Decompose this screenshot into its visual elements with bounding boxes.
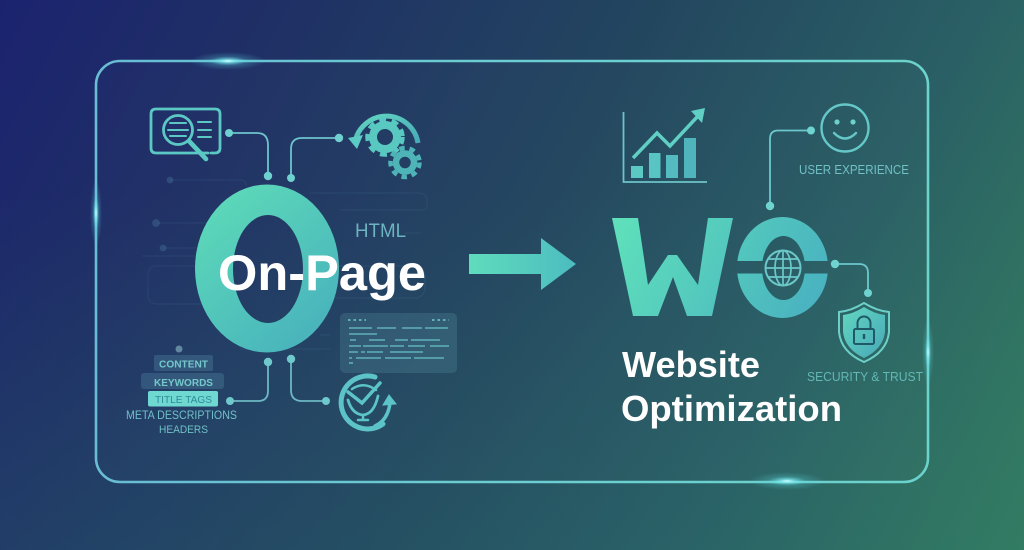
connector: WO to smiley xyxy=(766,126,815,210)
icon: gears xyxy=(348,116,420,177)
label: HTML: HTML xyxy=(355,221,406,242)
faint circuit background lines xyxy=(142,177,427,349)
heading: Website Optimization xyxy=(621,344,842,429)
icon: smiley xyxy=(822,104,868,152)
connector: WO to shield xyxy=(831,260,872,297)
letter W xyxy=(612,218,733,316)
code panel xyxy=(340,313,457,373)
tag: title tags: TITLE TAGS xyxy=(155,394,212,406)
small dot xyxy=(176,346,182,352)
tag: content: CONTENT xyxy=(159,358,209,370)
icon: growth chart xyxy=(624,108,707,182)
connector: O to check icon xyxy=(287,355,330,405)
letter O with gap xyxy=(737,217,828,318)
heading: Website Optimization: Optimization xyxy=(621,388,842,429)
icon: check cycle xyxy=(341,376,396,429)
tag: meta descriptions: META DESCRIPTIONS xyxy=(126,410,237,422)
big letter O xyxy=(195,184,339,352)
heading: On-Page: On-Page xyxy=(218,244,426,301)
connector: tags to O xyxy=(226,358,272,405)
icon: globe xyxy=(766,250,800,286)
panel frame xyxy=(90,52,934,490)
tag list xyxy=(126,346,237,436)
tag: keywords: KEYWORDS xyxy=(154,377,213,389)
arrow xyxy=(469,238,576,290)
tag: headers: HEADERS xyxy=(159,424,208,436)
icon: search document xyxy=(151,109,220,159)
icon: shield xyxy=(839,303,889,362)
heading: Website Optimization: Website xyxy=(622,344,760,385)
connector: search to O xyxy=(225,129,272,180)
label: user experience: USER EXPERIENCE xyxy=(799,162,909,177)
connector: gears to O xyxy=(287,134,343,182)
label: security and trust: SECURITY & TRUST xyxy=(807,369,923,384)
